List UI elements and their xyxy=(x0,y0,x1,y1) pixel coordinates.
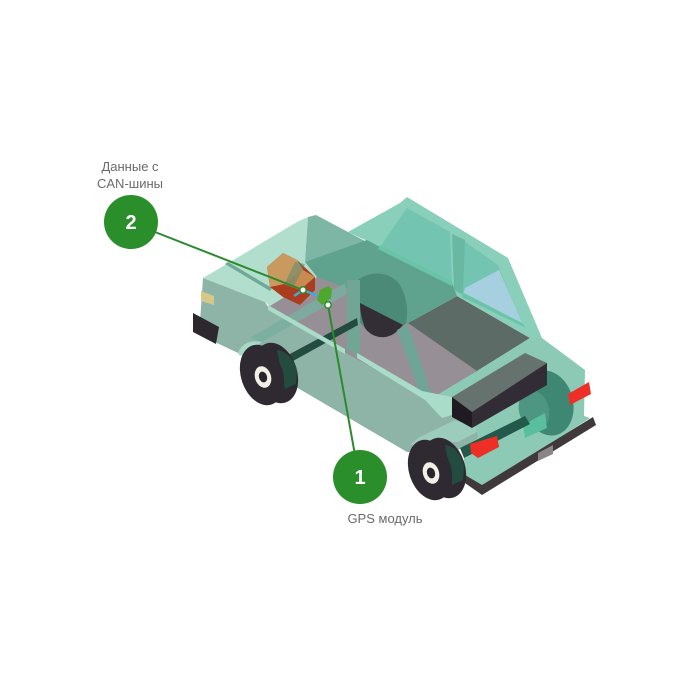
rear seat xyxy=(350,274,407,337)
sill highlight xyxy=(268,305,345,354)
seat dark underside xyxy=(360,303,403,337)
front wheel xyxy=(232,337,306,411)
side body panel xyxy=(200,278,478,452)
roof side panel xyxy=(305,240,457,331)
marker 1: 1 xyxy=(354,467,366,489)
windshield translucent panel xyxy=(305,215,367,262)
rear bumper xyxy=(465,417,596,495)
left tail light xyxy=(470,436,499,458)
trunk box xyxy=(452,353,547,428)
car illustration xyxy=(193,197,596,506)
label: CAN bus data xyxy=(97,159,163,191)
marker 2 xyxy=(104,195,158,249)
rear pillar xyxy=(397,325,432,396)
rear axle xyxy=(460,416,530,458)
label: GPS module: GPS модуль xyxy=(347,511,423,526)
marker 1 xyxy=(333,450,387,504)
rear arch band xyxy=(410,420,477,445)
window sill rear xyxy=(462,292,526,328)
fender band xyxy=(250,283,347,342)
sill highlight rear xyxy=(357,353,452,418)
hood xyxy=(203,217,317,306)
spare wheel xyxy=(514,365,581,441)
marker 2: 2 xyxy=(125,212,137,234)
hood shadow groove xyxy=(225,262,272,291)
window pillar xyxy=(452,234,465,295)
anchor dot 1 xyxy=(325,302,331,308)
A-pillar shadow xyxy=(285,262,305,288)
trunk lid rear panel xyxy=(432,338,590,488)
front bumper xyxy=(193,313,219,344)
roof frame xyxy=(348,197,542,338)
rear window blue part xyxy=(463,270,522,323)
front arch glow xyxy=(238,341,262,356)
interior floor xyxy=(262,276,480,400)
front axle xyxy=(288,318,358,361)
engine block xyxy=(267,253,315,305)
headlight xyxy=(201,291,214,305)
front window xyxy=(380,208,452,283)
label: CAN bus data: Данные с xyxy=(101,159,159,174)
window sill front xyxy=(378,245,452,286)
right tail light xyxy=(568,382,591,405)
trunk floor dark panel xyxy=(408,296,530,371)
label: CAN bus data: CAN-шины xyxy=(97,176,163,191)
anchor dot 2 xyxy=(300,287,306,293)
rear wheel xyxy=(400,432,474,506)
cable xyxy=(294,290,318,296)
door pillar xyxy=(347,280,360,357)
icon: GPS module xyxy=(317,286,332,305)
callout line 2 xyxy=(155,232,303,290)
callout line 1 xyxy=(328,305,355,455)
rear window xyxy=(463,242,522,325)
